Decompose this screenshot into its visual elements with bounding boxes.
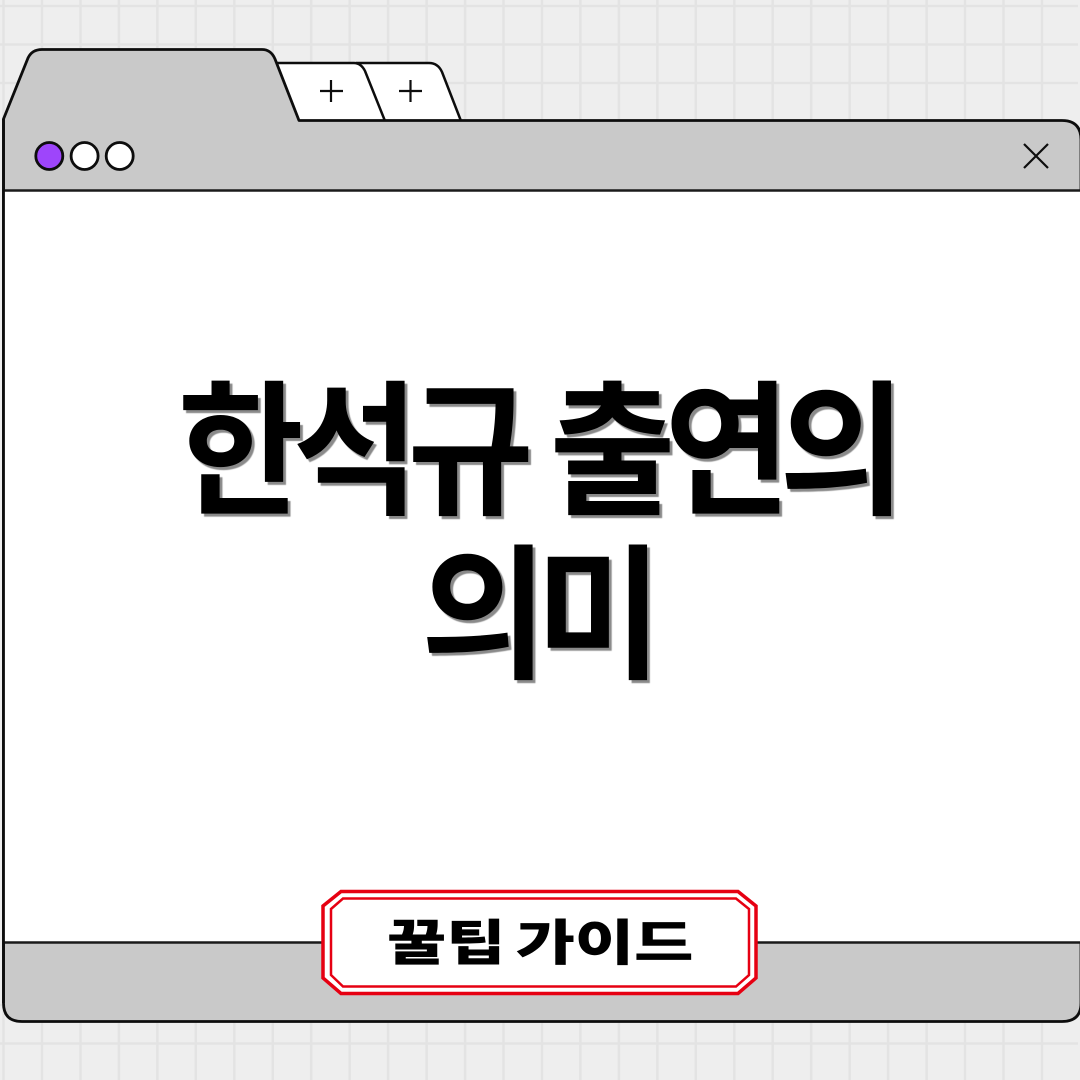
badge label: 꿀팁 가이드 — [387, 917, 693, 971]
content area — [4, 191, 1080, 942]
icon: close — [1024, 144, 1048, 168]
badge frame — [323, 892, 756, 994]
title line 2: 의미 — [421, 535, 651, 698]
tab: plus tab 1 — [272, 63, 385, 121]
title line 1: 한석규 출연의 — [178, 371, 894, 534]
tab: plus tab 2 — [350, 63, 461, 121]
window buttons — [36, 142, 133, 170]
